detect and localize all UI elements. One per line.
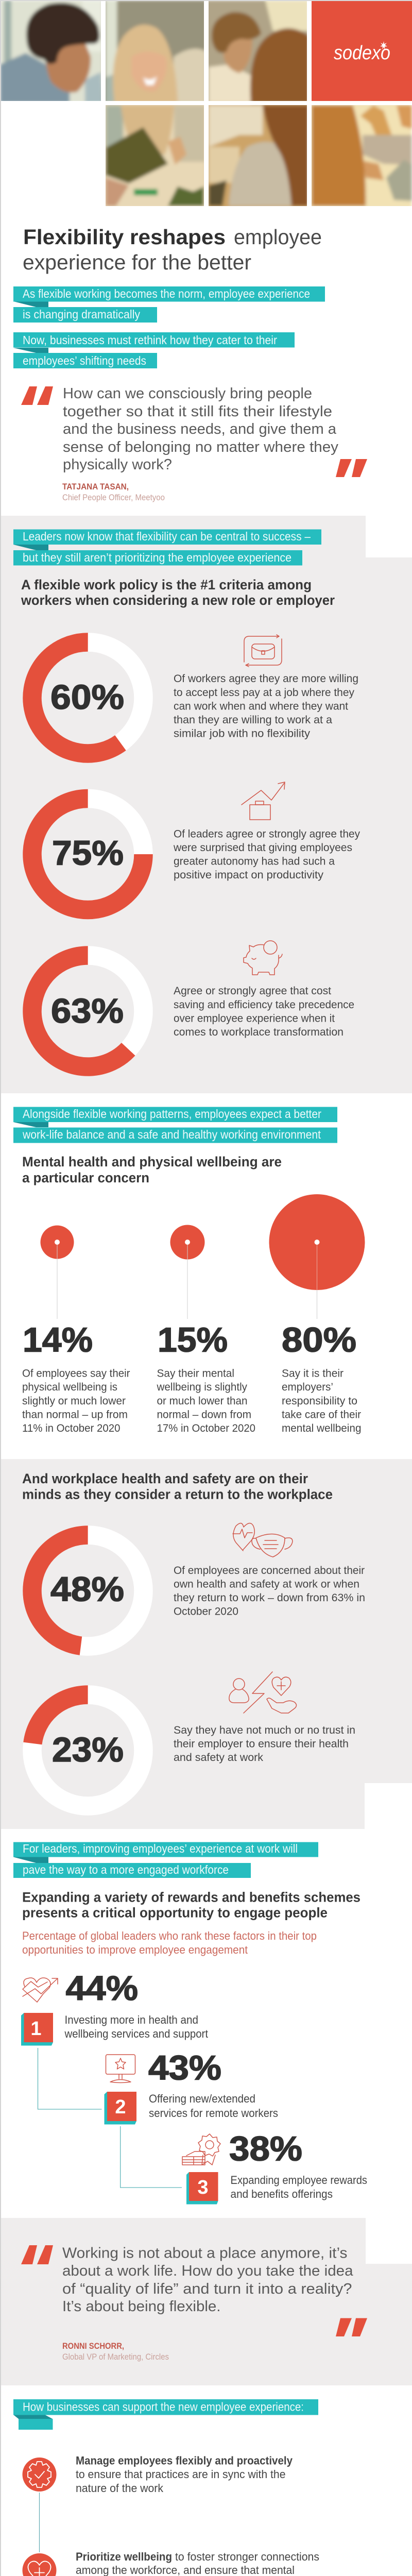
heading: mental health: a particular concern <box>22 1170 149 1185</box>
stat: 75% donut <box>32 799 143 910</box>
text: 60% description: to accept less pay at a job where they <box>174 687 354 699</box>
text: 48% description <box>174 1565 365 1618</box>
text: 14% description: slightly or much lower <box>22 1395 126 1407</box>
text: 80% description <box>282 1367 362 1434</box>
banner: flexible working: As flexible working becomes the norm, employee experience <box>23 287 310 300</box>
attribution: Global VP of Marketing, Circles <box>62 2352 169 2362</box>
attribution: RONNI SCHORR, <box>62 2341 124 2351</box>
text: 63% description <box>174 985 354 1038</box>
banner: businesses must rethink: Now, businesses must rethink how they cater to their <box>23 333 277 347</box>
icon: closing quote mark <box>336 2318 367 2336</box>
text: 60% description: Of workers agree they are more willing <box>174 673 358 685</box>
banner: leaders now know <box>13 530 321 566</box>
banner: businesses must rethink: employees’ shifting needs <box>23 354 146 367</box>
heading: workplace health and safety <box>22 1471 333 1502</box>
step 3: rewards and benefits: 38% <box>229 2130 302 2168</box>
connector: step 1 to step 2 <box>38 2048 102 2109</box>
stat: 14% proportional circle: 14% <box>23 1321 93 1359</box>
icon: briefcase with loop arrows <box>244 635 282 667</box>
banner: flexible working <box>13 286 325 323</box>
stat: 15% proportional circle: 15% <box>158 1321 228 1359</box>
heading: rewards and benefits: presents a critical opportunity to engage people <box>22 1905 328 1921</box>
icon: broken trust between person and care <box>229 1672 297 1713</box>
title <box>23 225 322 274</box>
quote text: sense of belonging no matter where they <box>63 439 338 455</box>
stat: 14% proportional circle <box>23 1225 93 1359</box>
text: 14% description: Of employees say their <box>22 1367 130 1380</box>
banner: how businesses can support: How businesses can support the new employee experience: <box>23 2400 304 2413</box>
step 3: rewards and benefits <box>182 2130 367 2204</box>
text: 80% description: take care of their <box>282 1409 361 1421</box>
text: 75% description <box>173 828 360 881</box>
banner: engaged workforce: pave the way to a more engaged workforce <box>23 1863 229 1876</box>
heading: mental health: Mental health and physical wellbeing are <box>22 1154 282 1170</box>
stat: 15% proportional circle <box>158 1225 228 1359</box>
text: 80% description: Say it is their <box>282 1367 344 1380</box>
banner: leaders now know: but they still aren’t prioritizing the employee experience <box>23 551 291 564</box>
stat: 75% donut: 75% <box>52 834 124 873</box>
logo tile: sodexo <box>312 1 412 101</box>
text: 15% description: normal – down from <box>157 1409 251 1421</box>
banner: engaged workforce <box>13 1842 318 1878</box>
banner: how businesses can support <box>13 2399 318 2430</box>
title: experience for the better <box>23 250 251 274</box>
banner: work-life balance: work-life balance and a safe and healthy working environment <box>22 1128 321 1141</box>
stat: 23% donut: 23% <box>52 1731 124 1769</box>
quote text: and the business needs, and give them a <box>63 421 337 437</box>
number box 2 <box>104 2092 136 2125</box>
text: 15% description: Say their mental <box>157 1367 234 1380</box>
attribution <box>62 2341 169 2362</box>
step 2: remote workers: services for remote workers <box>149 2107 278 2120</box>
item: manage employees flexibly: to ensure that practices are in sync with the <box>76 2468 285 2481</box>
text: 75% description: Of leaders agree or strongly agree they <box>174 828 360 840</box>
icon: productivity arrow over briefcase <box>242 782 285 820</box>
quote: Ronni Schorr <box>21 2245 367 2362</box>
banner: flexible working: is changing dramatically <box>23 308 140 321</box>
banner: work-life balance: Alongside flexible working patterns, employees expect a better <box>23 1107 321 1121</box>
icon: monitor with star <box>106 2055 135 2082</box>
timeline connector <box>39 2493 40 2576</box>
stat: 48% donut: 48% <box>50 1570 124 1608</box>
connector: step 2 to step 3 <box>121 2126 182 2188</box>
item: prioritize wellbeing: to foster stronger connections <box>175 2550 319 2563</box>
attribution: TATJANA TASAN, <box>62 482 129 492</box>
text: 63% description: over employee experience when it <box>174 1013 335 1024</box>
step 2: remote workers: Offering new/extended <box>149 2092 255 2105</box>
text: 63% description: comes to workplace transformation <box>174 1026 344 1038</box>
logo star <box>380 41 387 49</box>
banner: work-life balance <box>13 1107 337 1143</box>
text: 48% description: October 2020 <box>174 1605 238 1618</box>
quote text: of “quality of life” and turn it into a reality? <box>62 2281 352 2297</box>
step 3: rewards and benefits: and benefits offerings <box>231 2188 333 2200</box>
quote text: Working is not about a place anymore, it’s <box>62 2245 347 2262</box>
text: 15% description <box>157 1367 255 1434</box>
text: 80% description: mental wellbeing <box>282 1422 362 1434</box>
stat: 48% donut <box>26 1529 150 1653</box>
text: 60% description: than they are willing to work at a <box>174 714 332 726</box>
stat: 60% donut: 60% <box>50 678 124 717</box>
quote text: How can we consciously bring people <box>63 385 312 402</box>
attribution: Chief People Officer, Meetyoo <box>62 493 165 502</box>
text: 23% description <box>174 1724 355 1764</box>
text: 23% description: and safety at work <box>174 1752 264 1764</box>
icon: opening quote mark <box>21 386 53 405</box>
item: manage employees flexibly <box>23 2454 293 2495</box>
text: 75% description: greater autonomy has had such a <box>174 855 335 868</box>
text: 48% description: own health and safety at work or when <box>174 1579 359 1590</box>
banner: engaged workforce: For leaders, improving employees’ experience at work will <box>23 1842 298 1855</box>
banner: businesses must rethink <box>13 332 295 368</box>
text: 75% description: positive impact on productivity <box>174 869 324 881</box>
heading: flexible work policy: workers when considering a new role or employer <box>21 592 335 608</box>
stat: 60% donut <box>10 620 165 775</box>
icon: piggy bank with coin <box>244 941 282 975</box>
heading: rewards and benefits: Expanding a variety of rewards and benefits schemes <box>22 1890 360 1905</box>
item: prioritize wellbeing <box>23 2550 319 2576</box>
quote text <box>63 385 338 473</box>
text: 14% description: 11% in October 2020 <box>22 1422 121 1434</box>
number box 3: 3 <box>197 2177 209 2198</box>
title: Flexibility reshapes <box>23 225 226 249</box>
icon: opening quote mark <box>21 2245 53 2264</box>
text: 48% description: they return to work – down from 63% in <box>174 1592 365 1604</box>
text: 80% description: employers’ <box>282 1381 333 1393</box>
text: 14% description: than normal – up from <box>22 1409 128 1421</box>
icon: heart with pulse and face mask <box>233 1523 293 1557</box>
heading: rewards and benefits <box>22 1890 360 1921</box>
photo grid: colleagues at a table <box>0 0 412 209</box>
step 2: remote workers <box>104 2048 278 2125</box>
text: 14% description <box>22 1367 130 1434</box>
text: 48% description: Of employees are concerned about their <box>174 1565 365 1577</box>
text: percentage of global leaders: Percentage of global leaders who rank these factors in their top <box>22 1929 317 1942</box>
icon: heart with plus <box>23 2553 57 2576</box>
text: percentage of global leaders: opportunities to improve employee engagement <box>22 1943 248 1956</box>
text: 60% description: similar job with no flexibility <box>174 727 311 740</box>
icon: rosette and banknotes <box>182 2134 220 2165</box>
heading: flexible work policy <box>21 577 335 608</box>
step 3: rewards and benefits: Expanding employee rewards <box>231 2174 367 2187</box>
text: 15% description: wellbeing is slightly <box>157 1381 247 1393</box>
text: 60% description <box>174 673 358 740</box>
icon: gear with check <box>23 2458 57 2492</box>
number box 2: 2 <box>115 2096 126 2118</box>
heading: flexible work policy: A flexible work policy is the #1 criteria among <box>21 577 312 592</box>
stat: 80% proportional circle <box>269 1194 365 1359</box>
text: 75% description: were surprised that giving employees <box>173 842 352 854</box>
item: manage employees flexibly: nature of the work <box>76 2482 164 2495</box>
icon: heart with rising arrow <box>23 1978 58 2002</box>
stat: 80% proportional circle: 80% <box>282 1321 356 1359</box>
stat: 63% donut <box>9 933 166 1090</box>
logo wordmark: sodexo <box>334 42 390 64</box>
number box 1 <box>21 2013 53 2045</box>
icon: closing quote mark <box>336 459 367 477</box>
quote: Tatjana Tasan <box>21 385 367 502</box>
banner: leaders now know: Leaders now know that flexibility can be central to success – <box>23 530 311 543</box>
panel: flexible work stats background <box>1 516 412 1093</box>
quote text: physically work? <box>63 456 172 473</box>
text: 23% description: Say they have not much or no trust in <box>174 1724 355 1736</box>
step 2: remote workers: 43% <box>148 2048 221 2088</box>
quote text <box>62 2245 353 2315</box>
text: 63% description: saving and efficiency take precedence <box>174 999 354 1011</box>
text: 23% description: their employer to ensure their health <box>174 1738 349 1750</box>
heading: mental health <box>22 1154 282 1185</box>
step 1: health and wellbeing: wellbeing services and support <box>64 2027 208 2040</box>
text: 80% description: responsibility to <box>282 1395 357 1407</box>
text: 15% description: 17% in October 2020 <box>157 1422 255 1434</box>
title: employee <box>234 225 322 249</box>
number box 3 <box>186 2172 218 2204</box>
number box 1: 1 <box>30 2018 42 2040</box>
quote text: together so that it still fits their lifestyle <box>63 403 332 420</box>
heading: workplace health and safety: And workplace health and safety are on their <box>22 1471 308 1486</box>
text: 63% description: Agree or strongly agree that cost <box>174 985 331 997</box>
text: 60% description: can work when and where they want <box>174 701 348 712</box>
item: prioritize wellbeing: Prioritize wellbeing <box>76 2550 172 2563</box>
quote text: It’s about being flexible. <box>62 2298 220 2315</box>
attribution <box>62 482 165 502</box>
text: 15% description: or much lower than <box>157 1395 247 1407</box>
step 1: health and wellbeing: 44% <box>66 1969 138 2008</box>
heading: workplace health and safety: minds as they consider a return to the workplace <box>22 1487 333 1502</box>
text: 14% description: physical wellbeing is <box>22 1381 117 1393</box>
panel: workplace health and safety background <box>1 1459 412 1829</box>
text: percentage of global leaders <box>22 1929 317 1956</box>
panel: quote background <box>1 2218 412 2385</box>
quote text: about a work life. How do you take the idea <box>62 2263 353 2279</box>
item: manage employees flexibly: Manage employees flexibly and proactively <box>76 2454 293 2467</box>
step 1: health and wellbeing <box>21 1969 208 2045</box>
step 1: health and wellbeing: Investing more in health and <box>65 2013 198 2026</box>
stat: 63% donut: 63% <box>51 992 124 1030</box>
stat: 23% donut <box>26 1688 150 1812</box>
